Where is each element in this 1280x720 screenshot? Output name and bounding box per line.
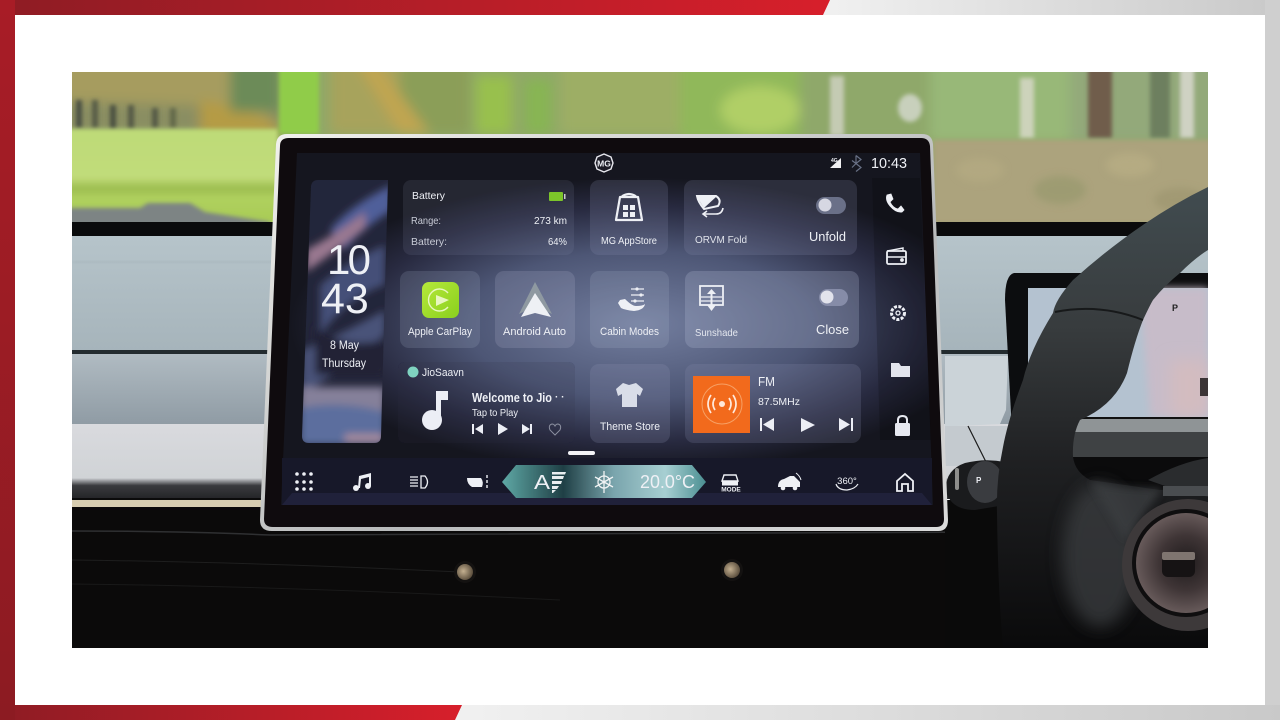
panel: mg appstore: MG AppStore bbox=[601, 235, 657, 247]
panel: battery: Range: bbox=[411, 215, 441, 227]
panel: apple carplay: Apple CarPlay bbox=[408, 326, 472, 338]
panel: jiosaavn player: JioSaavn bbox=[422, 367, 464, 379]
panel: wallpaper clock: 43 bbox=[321, 275, 369, 323]
panel: jiosaavn player: Tap to Play bbox=[472, 407, 519, 419]
icon: mirror fold bbox=[697, 196, 723, 217]
home indicator bbox=[568, 451, 595, 455]
icon: folder bbox=[891, 363, 910, 377]
toggle bbox=[819, 289, 848, 306]
icon: fan level bbox=[552, 472, 566, 493]
panel: fm radio: FM bbox=[758, 375, 775, 389]
panel: right rail bbox=[872, 178, 931, 440]
silver bezel rim bbox=[260, 134, 948, 531]
icon: jiosaavn bbox=[408, 366, 418, 378]
panel: fm radio bbox=[685, 364, 861, 443]
climate control pill bbox=[502, 465, 706, 498]
panel: apple carplay bbox=[400, 271, 480, 348]
icon: music bbox=[353, 473, 371, 491]
status bar bbox=[595, 154, 907, 172]
icon: app grid bbox=[295, 472, 313, 491]
photo: car dashboard bbox=[50, 60, 1254, 650]
MG logo bbox=[595, 154, 613, 172]
icon: mirror bbox=[467, 475, 487, 488]
hedge bbox=[933, 140, 1228, 224]
gear selector knob: P bbox=[976, 476, 982, 485]
clock: 10:43 bbox=[871, 156, 907, 172]
icon: 360 view: 360° bbox=[837, 476, 857, 487]
panel: wallpaper clock bbox=[300, 180, 392, 445]
icon: t-shirt bbox=[616, 383, 643, 407]
green column bbox=[279, 60, 319, 134]
panel: battery: Battery: bbox=[411, 236, 447, 248]
panel: jiosaavn player: · · bbox=[555, 392, 564, 403]
panel: jiosaavn player bbox=[398, 362, 575, 443]
icon: wallet bbox=[887, 248, 906, 264]
icon: settings gear bbox=[892, 306, 904, 320]
panel: mg appstore bbox=[590, 180, 668, 255]
icon: radio tile bbox=[693, 376, 750, 433]
icon: headlight bbox=[410, 476, 428, 488]
panel: orvm fold: ORVM Fold bbox=[695, 234, 747, 246]
panel: cabin modes bbox=[590, 271, 669, 348]
panel: android auto: Android Auto bbox=[503, 326, 566, 338]
icon: drive mode bbox=[721, 475, 741, 494]
panel: android auto bbox=[495, 271, 575, 348]
panel: sunshade bbox=[685, 271, 859, 348]
wiper stalk bbox=[72, 200, 272, 222]
icon: shopping bag bbox=[616, 194, 642, 220]
icon: android auto bbox=[519, 282, 552, 317]
panel: battery bbox=[403, 180, 574, 255]
background trunks bbox=[74, 72, 1196, 140]
cluster gear label: P bbox=[1172, 303, 1178, 313]
toggle bbox=[816, 197, 846, 214]
touchscreen unit bbox=[260, 134, 948, 531]
display background bbox=[281, 153, 933, 505]
icon: sunshade bbox=[700, 286, 723, 311]
cluster car glyph bbox=[1200, 378, 1208, 396]
driver cluster screen bbox=[1005, 273, 1208, 492]
icon: phone bbox=[886, 194, 904, 212]
icon: music note bbox=[422, 391, 448, 430]
panel: battery: Battery bbox=[412, 190, 446, 202]
climate control pill: A bbox=[534, 472, 551, 494]
MG logo: MG bbox=[597, 158, 611, 168]
panel: battery: 273 km bbox=[534, 215, 567, 227]
panel: jiosaavn player: Welcome to Jio bbox=[472, 391, 552, 405]
photo buttons below screen bbox=[454, 559, 743, 583]
icon: lock bbox=[895, 416, 910, 436]
player controls bbox=[472, 423, 532, 435]
clock digits: 10 bbox=[327, 236, 371, 283]
icon: carplay bbox=[422, 282, 459, 318]
signal icon: 4G bbox=[831, 158, 838, 164]
panel: sunshade: Close bbox=[816, 323, 849, 337]
right dash panel tab bbox=[945, 356, 1008, 533]
panel: wallpaper clock: Thursday bbox=[322, 358, 366, 370]
panel: battery: 64% bbox=[548, 236, 567, 248]
lawn bbox=[50, 129, 278, 225]
battery icon bbox=[549, 192, 566, 201]
icon: snowflake sun bbox=[595, 471, 613, 493]
panel: orvm fold bbox=[684, 180, 857, 255]
icon: heart bbox=[549, 424, 561, 435]
dashboard surfaces bbox=[72, 222, 1208, 648]
icon: cabin modes hand bbox=[618, 287, 645, 311]
panel: sunshade: Sunshade bbox=[695, 327, 738, 339]
bluetooth icon bbox=[852, 156, 861, 172]
panel: theme store bbox=[590, 364, 670, 443]
radio controls bbox=[760, 418, 853, 432]
outdoor background bbox=[72, 72, 1208, 222]
panel: orvm fold: Unfold bbox=[809, 230, 846, 244]
icon: home bbox=[897, 474, 913, 491]
panel: cabin modes: Cabin Modes bbox=[600, 326, 659, 338]
date: 8 May bbox=[330, 340, 359, 352]
climate control pill: 20.0°C bbox=[640, 472, 695, 492]
icon: drive mode: MODE bbox=[721, 486, 741, 494]
bottom control bar bbox=[295, 465, 913, 498]
icon: car bbox=[778, 473, 801, 490]
gear selector knob bbox=[946, 460, 1005, 510]
signal icon bbox=[830, 158, 841, 168]
black glass bbox=[264, 138, 944, 527]
panel: theme store: Theme Store bbox=[600, 421, 660, 433]
steering wheel bbox=[997, 187, 1208, 634]
panel: fm radio: 87.5MHz bbox=[758, 396, 800, 408]
steering wheel control ring bbox=[1122, 499, 1208, 631]
